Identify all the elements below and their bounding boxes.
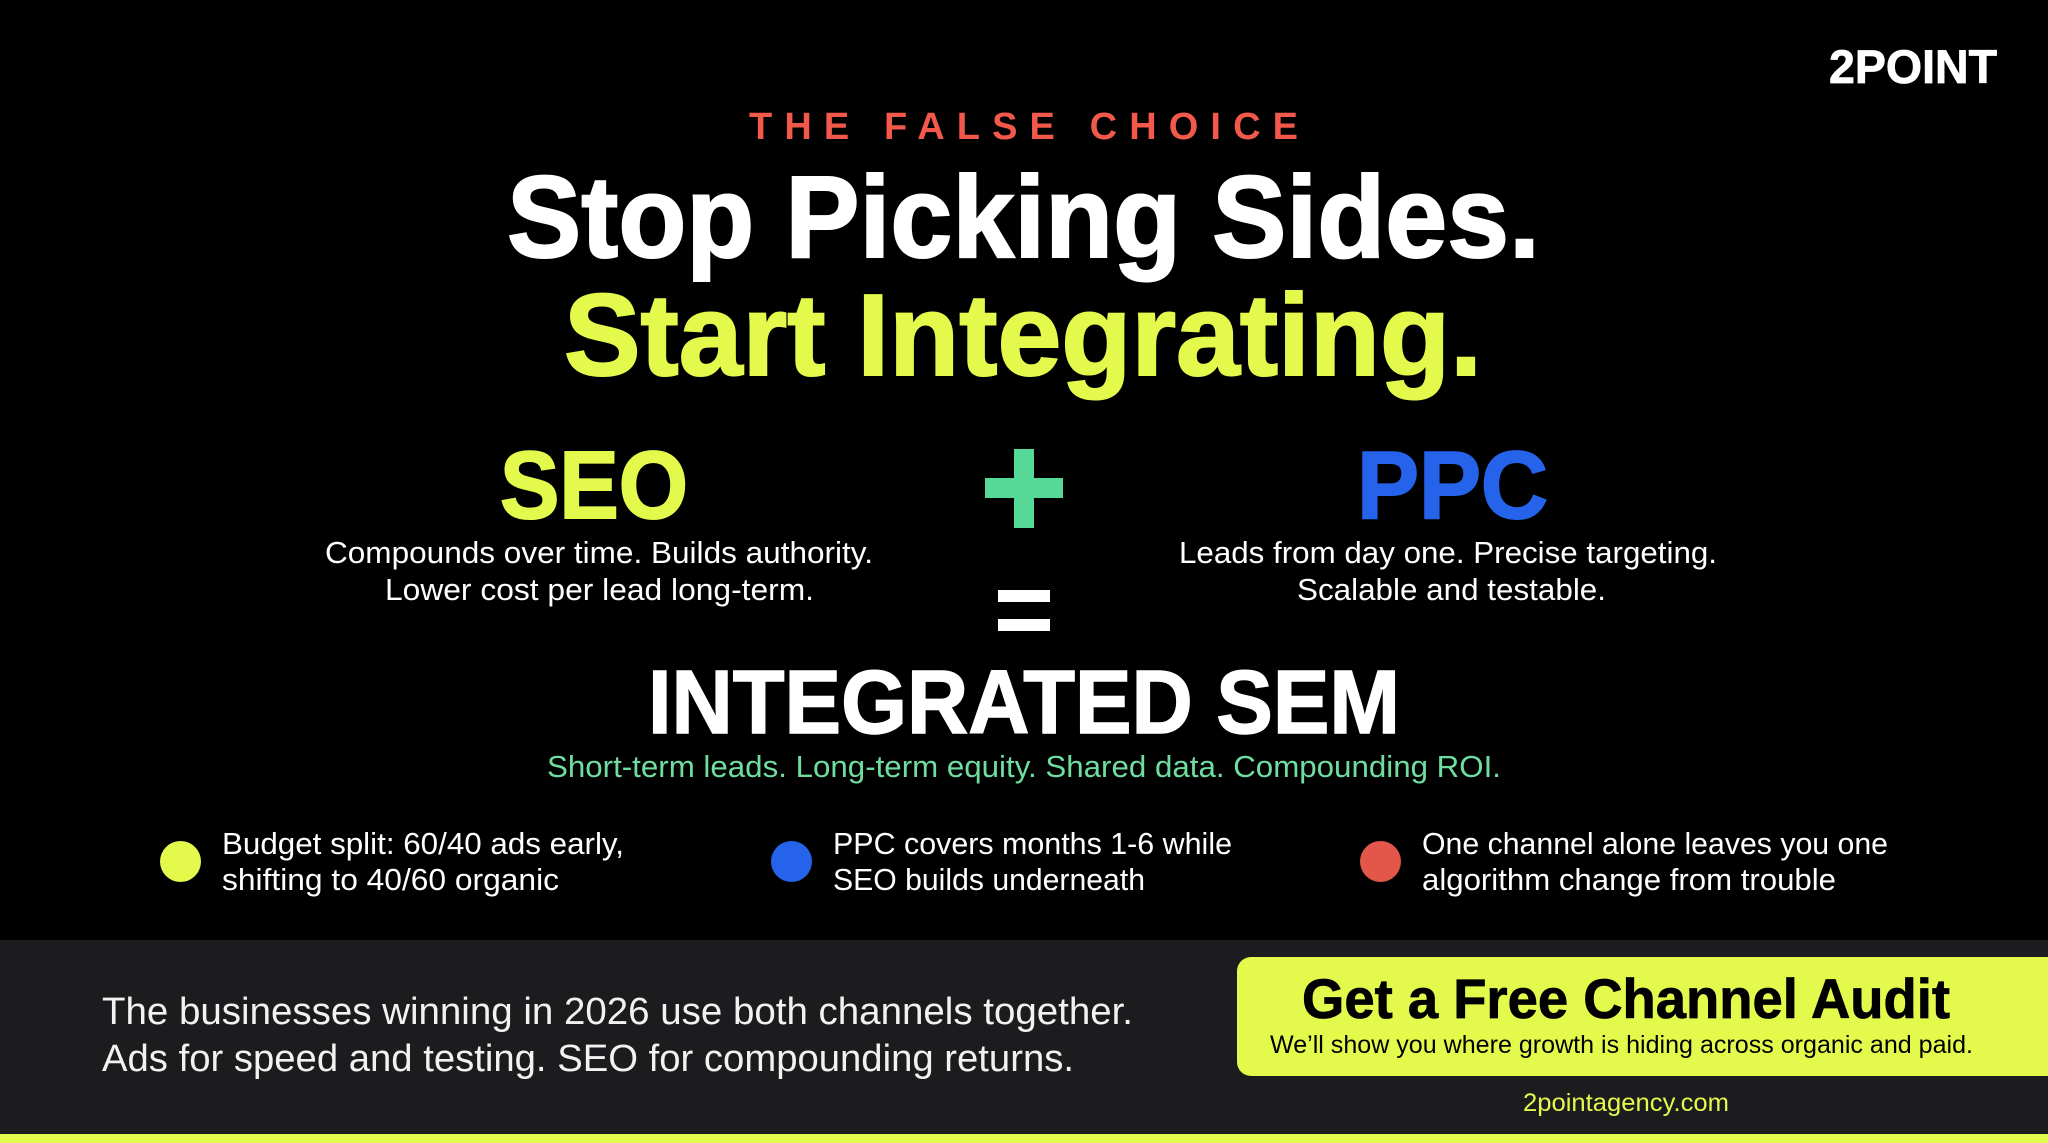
CTA button	[1237, 957, 2048, 1076]
website URL: 2pointagency.com	[1523, 1089, 1729, 1117]
icon: plus	[985, 449, 1063, 528]
result heading: INTEGRATED SEM	[648, 653, 1400, 753]
icon: equals	[998, 590, 1050, 631]
bullet: PPC coverage	[771, 826, 1232, 897]
PPC description: Scalable and testable.	[1297, 572, 1606, 607]
panel: SEO	[325, 432, 873, 607]
icon: red dot	[1360, 841, 1401, 882]
title line 1: Stop Picking Sides.	[507, 152, 1540, 282]
logo: 2POINT: 2POINT	[1829, 40, 1997, 93]
eyebrow: the false choice: THE FALSE CHOICE	[749, 106, 1298, 148]
PPC description: Leads from day one. Precise targeting.	[1179, 535, 1717, 570]
coverage text: PPC covers months 1-6 while	[833, 826, 1232, 861]
footer accent bar	[0, 1134, 2048, 1143]
result subtitle: Short-term leads. Long-term equity. Shared data. Compounding ROI.	[547, 749, 1501, 784]
footer message: The businesses winning in 2026 use both channels together.	[102, 991, 1133, 1033]
panel: PPC	[1179, 432, 1717, 607]
risk text: One channel alone leaves you one	[1422, 826, 1888, 861]
CTA heading: Get a Free Channel Audit	[1302, 967, 1950, 1030]
PPC heading: PPC	[1357, 432, 1548, 539]
footer band	[0, 940, 2048, 1143]
icon: lime dot	[160, 841, 201, 882]
risk text: algorithm change from trouble	[1422, 862, 1836, 897]
icon: blue dot	[771, 841, 812, 882]
SEO description: Compounds over time. Builds authority.	[325, 535, 873, 570]
budget text: shifting to 40/60 organic	[222, 862, 559, 897]
SEO heading: SEO	[500, 432, 688, 539]
coverage text: SEO builds underneath	[833, 862, 1145, 897]
bullet: one channel risk	[1360, 826, 1888, 897]
CTA subtext: We’ll show you where growth is hiding across organic and paid.	[1270, 1031, 1973, 1059]
title line 2: Start Integrating.	[564, 270, 1482, 400]
budget text: Budget split: 60/40 ads early,	[222, 826, 624, 861]
result: integrated SEM	[547, 653, 1501, 784]
title	[507, 152, 1540, 400]
SEO description: Lower cost per lead long-term.	[385, 572, 814, 607]
bullet: budget split	[160, 826, 624, 897]
footer message: Ads for speed and testing. SEO for compounding returns.	[102, 1038, 1074, 1080]
